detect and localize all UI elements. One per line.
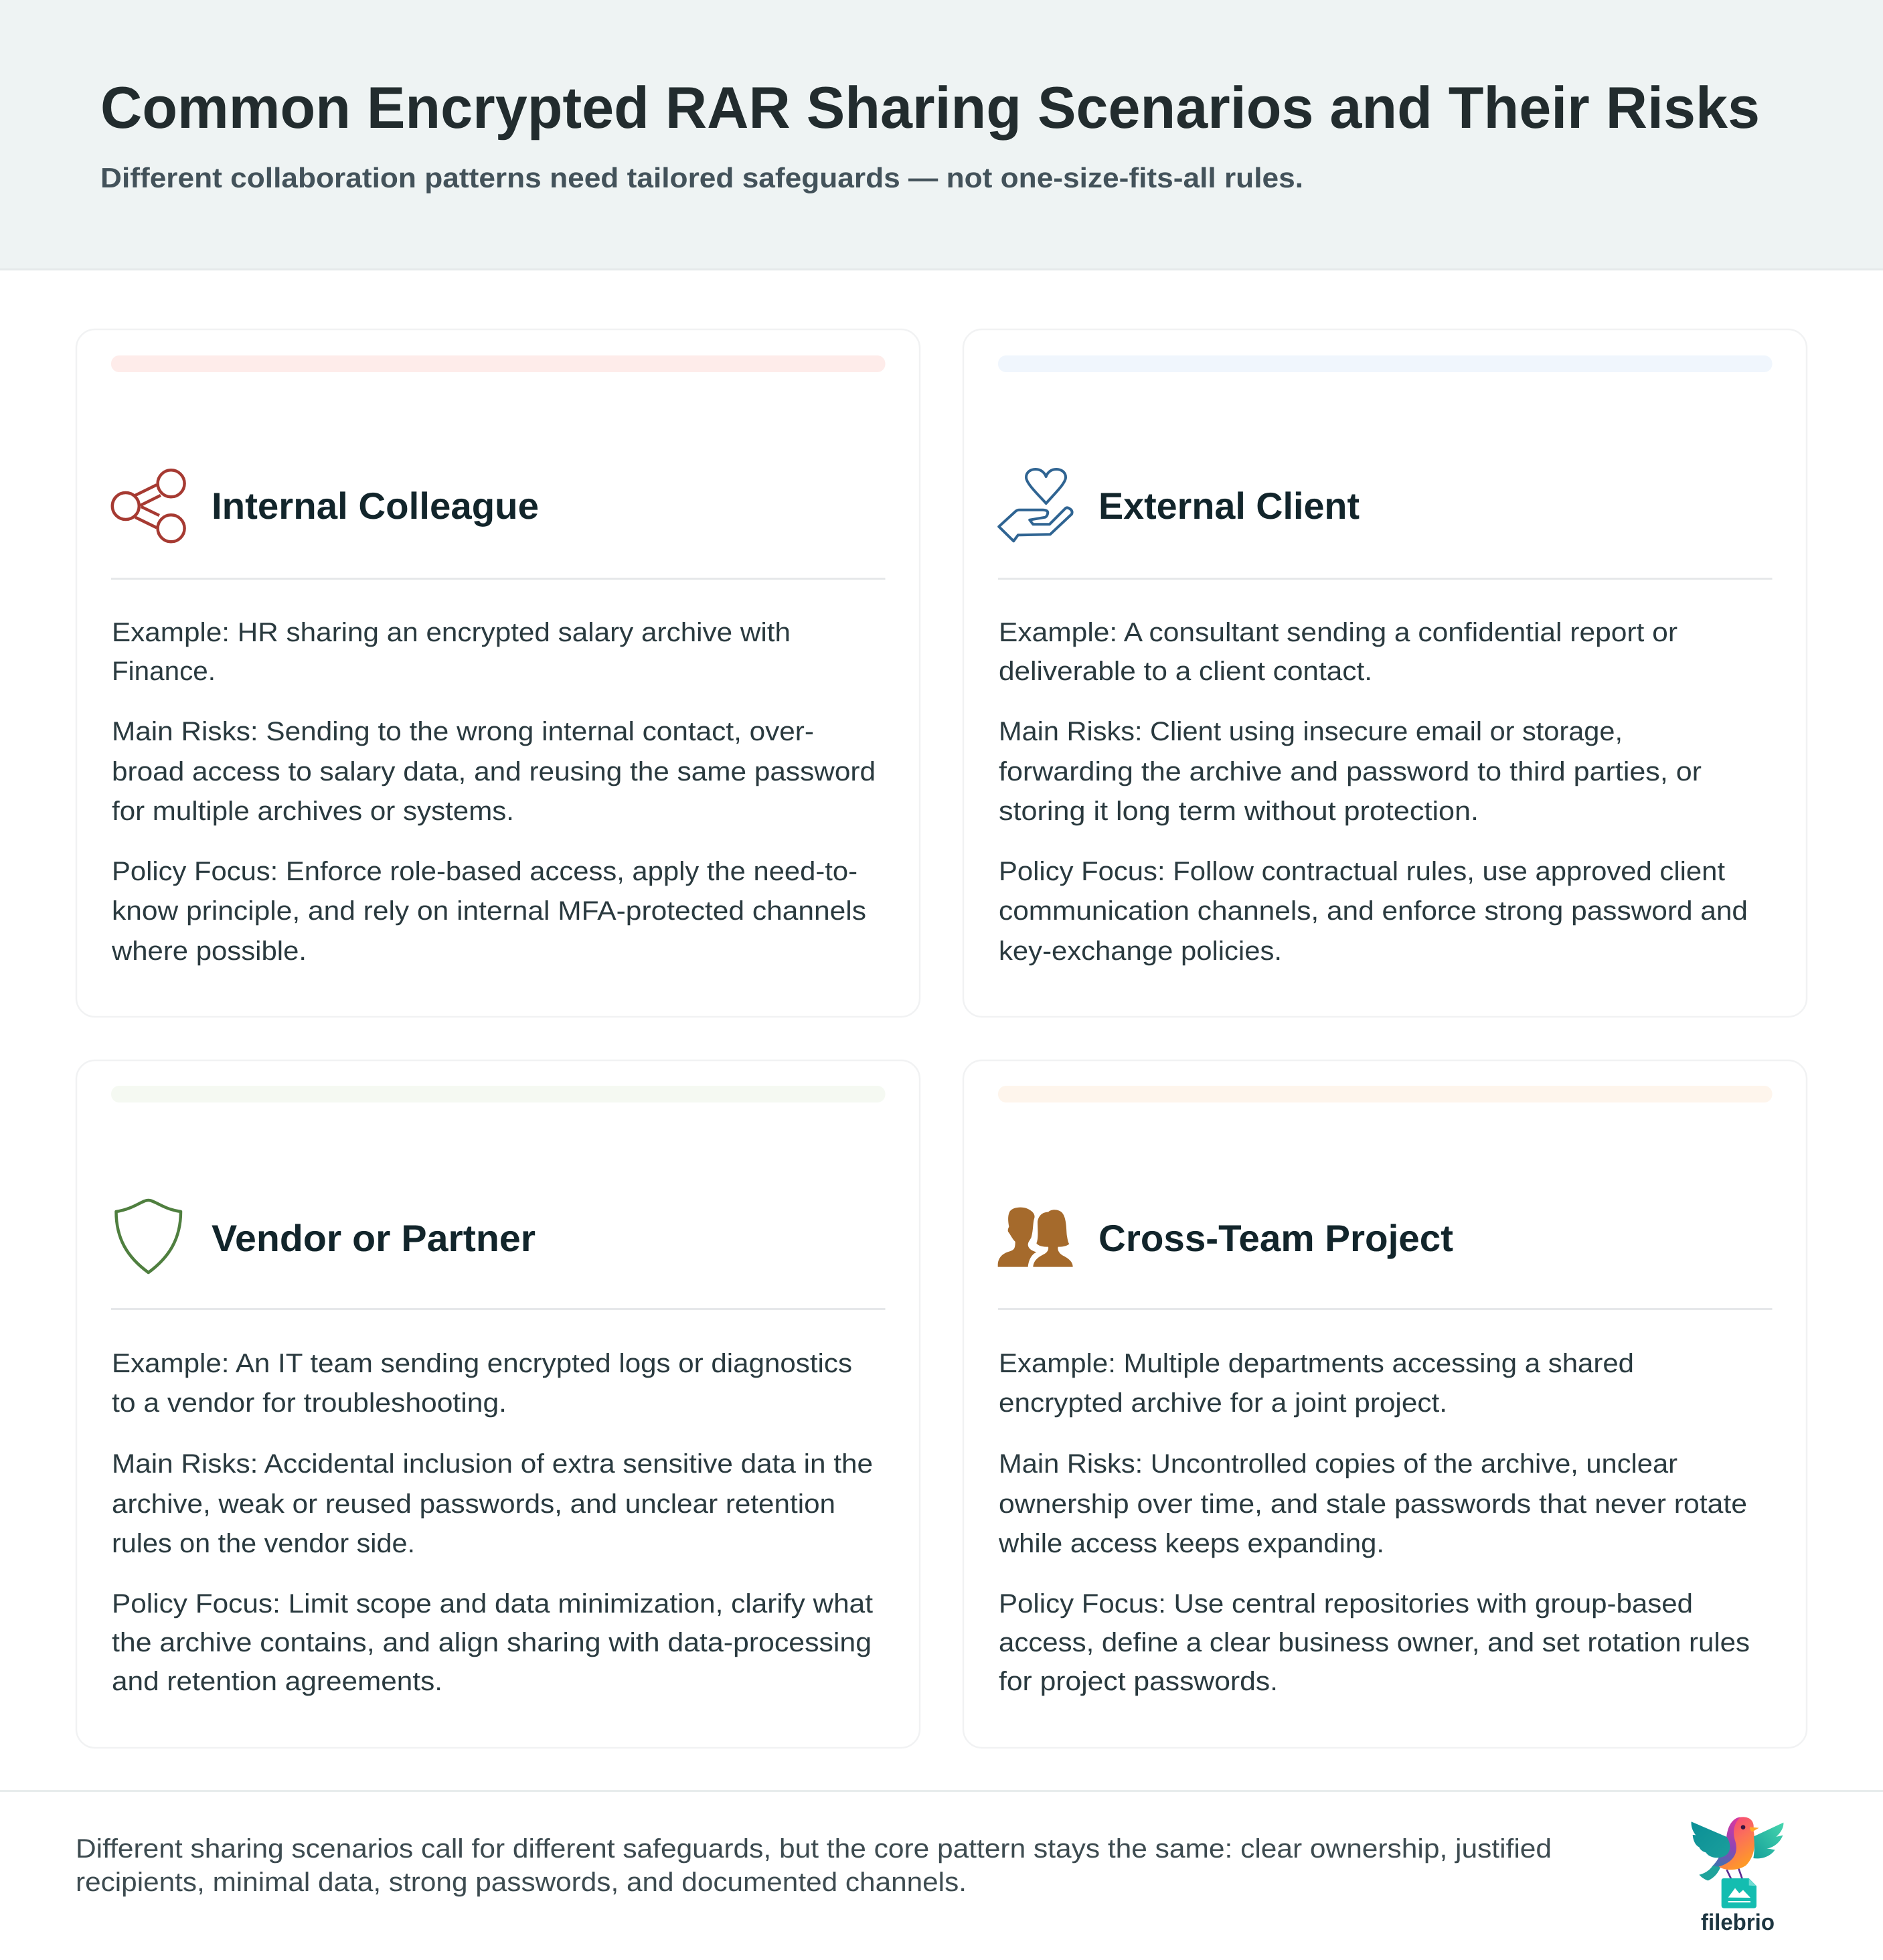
text: policy focus: know principle, and rely on internal MFA-protected channels xyxy=(112,896,866,926)
text: policy focus: and retention agreements. xyxy=(112,1667,442,1696)
accent bar: green xyxy=(111,1086,885,1102)
heading: External Client xyxy=(1098,485,1360,527)
accent bar: red xyxy=(111,355,885,372)
title: Common Encrypted RAR Sharing Scenarios and Their Risks xyxy=(100,74,1760,141)
text: main risks xyxy=(999,717,1702,826)
panel: Cross-Team Project xyxy=(963,1060,1807,1748)
text: example: deliverable to a client contact. xyxy=(999,657,1372,686)
logo wordmark: filebrio xyxy=(1701,1910,1775,1935)
icon: heart in hand xyxy=(999,469,1072,541)
text: policy focus: where possible. xyxy=(111,936,307,966)
text: example: Example: A consultant sending a confidential report or xyxy=(999,618,1677,647)
accent bar: blue xyxy=(998,355,1773,372)
text: main risks: broad access to salary data, and reusing the same password xyxy=(112,757,876,787)
text: policy focus: for project passwords. xyxy=(999,1667,1278,1696)
text: example xyxy=(999,618,1677,686)
text: main risks xyxy=(112,717,876,826)
text: policy focus: Policy Focus: Follow contractual rules, use approved client xyxy=(999,857,1725,886)
text: example: to a vendor for troubleshooting. xyxy=(112,1388,507,1418)
text: example: Example: HR sharing an encrypted salary archive with xyxy=(112,618,791,647)
text: main risks: rules on the vendor side. xyxy=(112,1529,415,1558)
text: policy focus: the archive contains, and align sharing with data-processing xyxy=(112,1628,872,1657)
footer note: Different sharing scenarios call for different safeguards, but the core pattern stays the same: clear ownership, justified xyxy=(76,1834,1552,1864)
text: policy focus xyxy=(999,1589,1750,1696)
text: policy focus xyxy=(111,857,866,966)
heading: Vendor or Partner xyxy=(212,1217,536,1259)
text: main risks: Main Risks: Uncontrolled copies of the archive, unclear xyxy=(999,1449,1677,1479)
icon: shield xyxy=(116,1200,181,1273)
text: policy focus: key-exchange policies. xyxy=(999,936,1282,966)
text: example: Finance. xyxy=(112,657,216,686)
text: policy focus xyxy=(112,1589,873,1696)
text: main risks: archive, weak or reused passwords, and unclear retention xyxy=(112,1489,835,1519)
panel: Vendor or Partner xyxy=(76,1060,920,1748)
text: example: Example: An IT team sending encrypted logs or diagnostics xyxy=(112,1349,852,1378)
footer note: recipients, minimal data, strong passwords, and documented channels. xyxy=(76,1868,967,1897)
footer note xyxy=(76,1834,1552,1897)
logo: filebrio bird xyxy=(1692,1817,1783,1935)
text: policy focus: access, define a clear business owner, and set rotation rules xyxy=(999,1628,1750,1657)
text: policy focus: Policy Focus: Limit scope and data minimization, clarify what xyxy=(112,1589,873,1619)
text: policy focus: Policy Focus: Use central repositories with group-based xyxy=(999,1589,1693,1619)
text: main risks: Main Risks: Sending to the wrong internal contact, over- xyxy=(112,717,814,746)
text: main risks: Main Risks: Client using insecure email or storage, xyxy=(999,717,1623,746)
accent bar: orange xyxy=(998,1086,1773,1102)
subtitle: Different collaboration patterns need tailored safeguards — not one-size-fits-all rules. xyxy=(100,162,1303,193)
text: main risks xyxy=(112,1449,873,1558)
text: main risks xyxy=(998,1449,1747,1558)
text: example xyxy=(112,1349,852,1418)
text: main risks: while access keeps expanding. xyxy=(998,1529,1384,1558)
heading: Internal Colleague xyxy=(212,485,539,527)
text: example xyxy=(999,1349,1634,1418)
heading: Cross-Team Project xyxy=(1098,1217,1453,1259)
icon: share nodes xyxy=(112,470,185,542)
panel: Internal Colleague xyxy=(76,329,920,1017)
text: main risks: Main Risks: Accidental inclusion of extra sensitive data in the xyxy=(112,1449,873,1479)
text: main risks: for multiple archives or systems. xyxy=(112,797,514,826)
text: policy focus xyxy=(999,857,1748,966)
header band xyxy=(0,0,1883,270)
text: policy focus: Policy Focus: Enforce role-based access, apply the need-to- xyxy=(112,857,857,886)
icon: two people xyxy=(998,1208,1073,1267)
text: example xyxy=(112,618,791,686)
text: main risks: ownership over time, and stale passwords that never rotate xyxy=(999,1489,1747,1519)
panel: External Client xyxy=(963,329,1807,1017)
text: example: encrypted archive for a joint project. xyxy=(999,1388,1447,1418)
text: main risks: forwarding the archive and password to third parties, or xyxy=(999,757,1702,787)
text: policy focus: communication channels, and enforce strong password and xyxy=(999,896,1748,926)
text: main risks: storing it long term without protection. xyxy=(999,797,1479,826)
text: example: Example: Multiple departments accessing a shared xyxy=(999,1349,1634,1378)
